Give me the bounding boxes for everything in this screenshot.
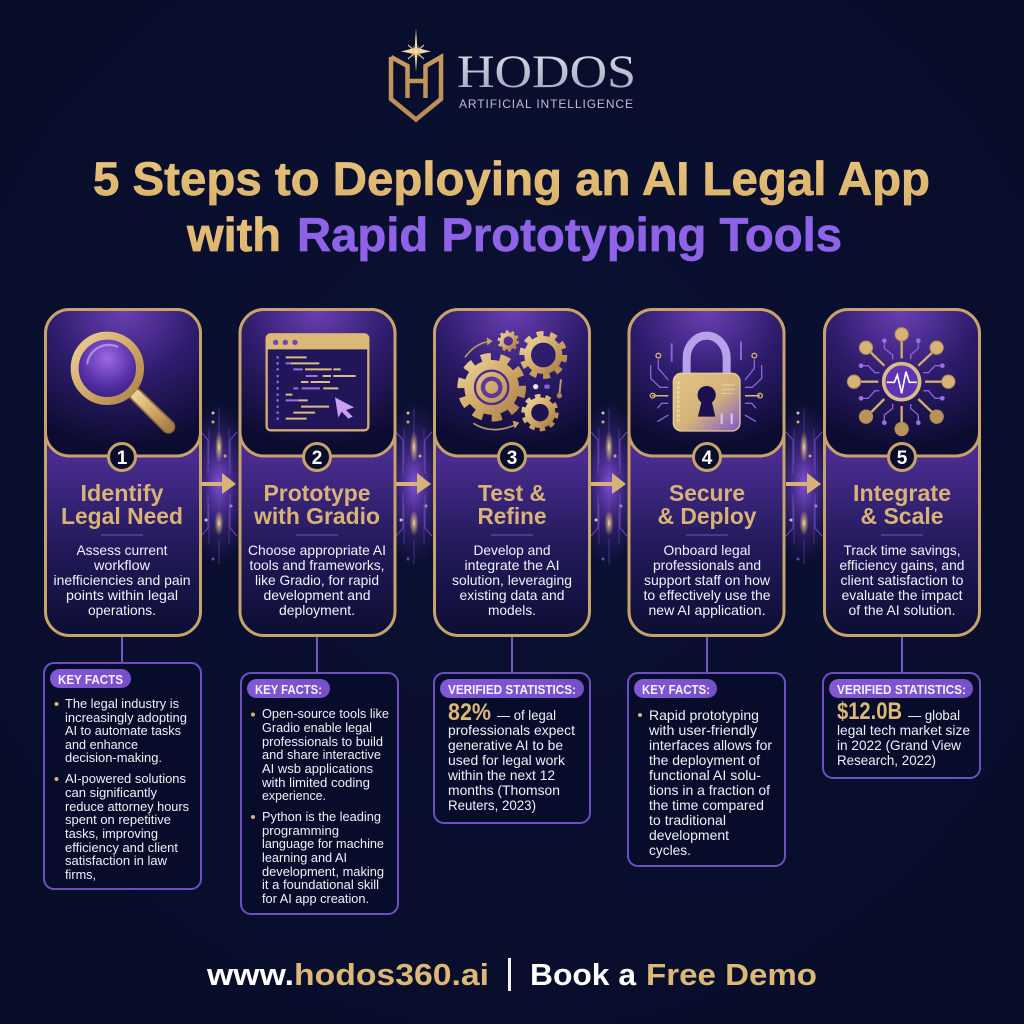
- fact list: satisfaction in law: [65, 853, 167, 868]
- panel: key facts 1: [44, 637, 201, 889]
- heading: Integrate: [853, 480, 951, 506]
- fact list: functional AI solu-: [649, 767, 761, 783]
- logo icon: shield with H and star: [391, 28, 441, 120]
- fact list: development, making: [262, 864, 384, 879]
- heading: & Deploy: [658, 503, 757, 529]
- heading: [658, 480, 757, 529]
- description: tools and frameworks,: [250, 557, 384, 573]
- fact list: AI-powered solutions: [65, 771, 186, 786]
- arrow 2 to 3: [396, 473, 431, 494]
- step 2 card: [240, 310, 395, 636]
- description: Onboard legal: [664, 542, 750, 558]
- title: [93, 152, 930, 261]
- fact list: learning and AI: [262, 850, 347, 865]
- footer: www.: [206, 957, 294, 992]
- panel: verified statistics 5: [823, 637, 980, 778]
- badge: key facts: KEY FACTS: [58, 672, 123, 687]
- statistic: 82%: — of legal: [497, 707, 556, 723]
- heading: Refine: [478, 503, 546, 529]
- fact list: decision-making.: [65, 750, 162, 765]
- fact list: [648, 707, 772, 858]
- description: models.: [488, 602, 536, 618]
- badge: verified statistics: VERIFIED STATISTICS:: [448, 682, 576, 697]
- panel: key facts 4: [628, 637, 785, 866]
- fact list: language for machine: [262, 836, 384, 851]
- arrow 3 to 4: [591, 473, 626, 494]
- description: [452, 542, 572, 618]
- fact list: and share interactive: [262, 747, 381, 762]
- description: deployment.: [279, 602, 355, 618]
- statistic: 82%: months (Thomson: [448, 782, 560, 798]
- step number 4: 4: [702, 448, 713, 469]
- fact list: firms,: [65, 867, 96, 882]
- description: like Gradio, for rapid: [255, 572, 379, 588]
- logo wordmark: HODOS: [457, 46, 636, 98]
- title: Rapid Prototyping Tools: [297, 208, 842, 261]
- icon: gears: [462, 332, 564, 430]
- fact list: the time compared: [649, 797, 764, 813]
- statistic: $12.0B: — global: [908, 707, 960, 723]
- description: operations.: [88, 602, 156, 618]
- description: to effectively use the: [644, 587, 771, 603]
- fact list: for AI app creation.: [262, 891, 369, 906]
- statistic: 82%: Reuters, 2023): [448, 797, 536, 813]
- title: with: [186, 208, 281, 261]
- fact list: [65, 696, 189, 882]
- fact list: [261, 706, 389, 906]
- heading: [253, 480, 380, 529]
- heading: & Scale: [860, 503, 944, 529]
- description: support staff on how: [644, 572, 771, 588]
- heading: Test &: [478, 480, 546, 506]
- step 5 card: [824, 310, 980, 636]
- heading: [853, 480, 951, 529]
- step number 3: 3: [507, 448, 517, 469]
- fact list: spent on repetitive: [65, 812, 171, 827]
- footer: Free Demo: [646, 957, 817, 992]
- icon: network hub with pulse: [847, 328, 955, 436]
- description: [644, 542, 771, 618]
- fact list: AI wsb applications: [262, 761, 373, 776]
- step 3 card: [434, 310, 590, 636]
- statistic: $12.0B: [837, 698, 970, 768]
- step number 2: 2: [312, 448, 322, 469]
- description: professionals and: [653, 557, 761, 573]
- fact list: experience.: [262, 788, 326, 803]
- panel: verified statistics 3: [434, 637, 590, 823]
- description: of the AI solution.: [848, 602, 956, 618]
- fact list: reduce attorney hours: [65, 799, 189, 814]
- badge: key facts: [634, 679, 717, 698]
- description: [840, 542, 964, 618]
- fact list: interfaces allows for: [649, 737, 772, 753]
- fact list: can significantly: [65, 785, 157, 800]
- statistic: 82%: professionals expect: [448, 722, 575, 738]
- statistic: 82%: generative AI to be: [448, 737, 563, 753]
- footer: Book a: [530, 957, 637, 992]
- fact list: development: [649, 827, 729, 843]
- fact list: programming: [262, 823, 339, 838]
- panel: key facts 2: [241, 637, 398, 914]
- logo tagline: ARTIFICIAL INTELLIGENCE: [459, 97, 633, 111]
- description: Track time savings,: [844, 542, 960, 558]
- step number 2: [304, 444, 330, 470]
- fact list: efficiency and client: [65, 840, 178, 855]
- statistic: $12.0B: $12.0B: [837, 698, 902, 725]
- badge: key facts: KEY FACTS:: [255, 682, 322, 697]
- step number 5: 5: [897, 448, 908, 469]
- icon: padlock with circuits: [650, 336, 762, 431]
- step number 1: 1: [117, 448, 128, 469]
- heading: [478, 480, 546, 529]
- fact list: Open-source tools like: [262, 706, 389, 721]
- fact list: with user-friendly: [648, 722, 757, 738]
- arrow 4 to 5: [786, 473, 821, 494]
- heading: Prototype: [264, 480, 370, 506]
- statistic: 82%: used for legal work: [448, 752, 566, 768]
- heading: Identify: [80, 480, 164, 506]
- badge: key facts: [247, 679, 330, 698]
- fact list: it a foundational skill: [262, 877, 379, 892]
- description: workflow: [93, 557, 151, 573]
- fact list: with limited coding: [261, 775, 370, 790]
- description: [54, 542, 190, 618]
- description: new AI application.: [648, 602, 766, 618]
- arrow 1 to 2: [201, 473, 236, 494]
- description: existing data and: [460, 587, 564, 603]
- step 4 card: [629, 310, 784, 636]
- step 1 card: [46, 310, 200, 636]
- heading: [61, 480, 183, 529]
- description: [248, 542, 386, 618]
- description: Develop and: [474, 542, 550, 558]
- fact list: Python is the leading: [262, 809, 381, 824]
- fact list: Rapid prototyping: [649, 707, 759, 723]
- fact list: Gradio enable legal: [262, 720, 372, 735]
- heading: Secure: [669, 480, 745, 506]
- statistic: 82%: within the next 12: [447, 767, 555, 783]
- step number 3: [498, 444, 526, 470]
- fact list: and enhance: [65, 737, 138, 752]
- fact list: to traditional: [649, 812, 726, 828]
- statistic: $12.0B: legal tech market size: [837, 722, 970, 738]
- title: 5 Steps to Deploying an AI Legal App: [93, 152, 930, 205]
- fact list: the deployment of: [649, 752, 760, 768]
- heading: Legal Need: [61, 503, 183, 529]
- description: solution, leveraging: [452, 572, 572, 588]
- fact list: tasks, improving: [65, 826, 158, 841]
- step number 1: [108, 444, 136, 470]
- description: client satisfaction to: [840, 572, 964, 588]
- heading: with Gradio: [253, 503, 380, 529]
- logo: [391, 28, 636, 120]
- footer: hodos360.ai: [294, 957, 489, 992]
- description: Assess current: [76, 542, 168, 558]
- statistic: $12.0B: in 2022 (Grand View: [837, 737, 962, 753]
- fact list: increasingly adopting: [65, 710, 187, 725]
- description: development and: [264, 587, 370, 603]
- fact list: cycles.: [649, 842, 691, 858]
- description: points within legal: [66, 587, 178, 603]
- fact list: The legal industry is: [65, 696, 179, 711]
- icon: magnifying glass: [75, 336, 168, 427]
- description: Choose appropriate AI: [248, 542, 386, 558]
- badge: key facts: KEY FACTS:: [642, 682, 710, 697]
- step number 4: [694, 444, 720, 470]
- step number 5: [888, 444, 916, 470]
- statistic: $12.0B: Research, 2022): [837, 752, 936, 768]
- fact list: AI to automate tasks: [65, 723, 181, 738]
- description: efficiency gains, and: [840, 557, 964, 573]
- fact list: professionals to build: [262, 734, 383, 749]
- fact list: tions in a fraction of: [649, 782, 770, 798]
- badge: verified statistics: VERIFIED STATISTICS:: [837, 682, 966, 697]
- description: integrate the AI: [464, 557, 560, 573]
- statistic: 82%: 82%: [448, 699, 491, 726]
- statistic: 82%: [447, 699, 575, 813]
- footer: [206, 957, 817, 992]
- description: evaluate the impact: [842, 587, 963, 603]
- description: inefficiencies and pain: [54, 572, 190, 588]
- icon: code window with cursor: [266, 334, 369, 430]
